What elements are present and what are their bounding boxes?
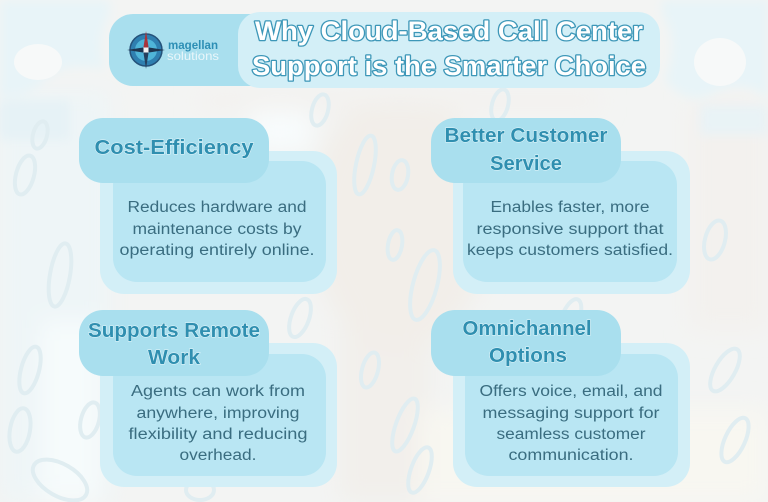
body text: cost-efficiency: Reduces hardware and <box>128 199 306 216</box>
heading tab: supports remote work: Work <box>148 347 201 369</box>
title panel <box>238 12 660 88</box>
body text: supports remote work: overhead. <box>180 447 256 464</box>
body text: supports remote work: anywhere, improving <box>136 405 300 422</box>
body text: omnichannel options <box>480 383 662 464</box>
logo wordmark: solutions <box>167 49 219 63</box>
body text: supports remote work: Agents can work from <box>131 383 305 400</box>
panel: cost-efficiency <box>79 118 337 294</box>
body text: better customer service: responsive support that <box>476 221 664 238</box>
heading tab: cost-efficiency: Cost-Efficiency <box>94 137 254 159</box>
heading tab: cost-efficiency <box>79 118 269 183</box>
body text: omnichannel options: messaging support for <box>482 405 660 422</box>
heading tab: supports remote work <box>79 310 269 376</box>
logo wordmark: magellan <box>168 38 218 52</box>
heading tab: better customer service: Better Customer <box>444 125 608 147</box>
icon: compass logo <box>127 31 165 69</box>
body text: omnichannel options: communication. <box>508 447 634 464</box>
heading tab: omnichannel options <box>431 310 621 376</box>
heading tab: omnichannel options: Omnichannel <box>462 318 592 340</box>
logo panel <box>109 14 279 86</box>
body text: better customer service: Enables faster, more <box>490 199 650 216</box>
body text: cost-efficiency: maintenance costs by <box>132 221 302 238</box>
title: Support is the Smarter Choice <box>252 51 646 81</box>
panel: supports remote work <box>79 310 337 487</box>
body text: better customer service <box>467 199 673 259</box>
body text: cost-efficiency: operating entirely online. <box>120 242 314 259</box>
title: Why Cloud-Based Call Center <box>255 16 644 46</box>
body text: better customer service: keeps customers satisfied. <box>467 242 673 259</box>
body text: omnichannel options: seamless customer <box>496 426 646 443</box>
header banner <box>109 12 660 88</box>
logo wordmark <box>167 38 219 63</box>
body text: supports remote work: flexibility and reducing <box>128 426 308 443</box>
heading tab: supports remote work: Supports Remote <box>88 320 260 342</box>
body text: supports remote work <box>128 383 308 464</box>
body text: cost-efficiency <box>120 199 314 259</box>
body text: omnichannel options: Offers voice, email, and <box>480 383 662 400</box>
panel: omnichannel options <box>431 310 690 487</box>
heading tab: better customer service <box>431 118 621 183</box>
heading tab: omnichannel options: Options <box>489 345 567 367</box>
panel: better customer service <box>431 118 690 294</box>
title <box>252 16 646 81</box>
heading tab: better customer service: Service <box>490 153 562 175</box>
